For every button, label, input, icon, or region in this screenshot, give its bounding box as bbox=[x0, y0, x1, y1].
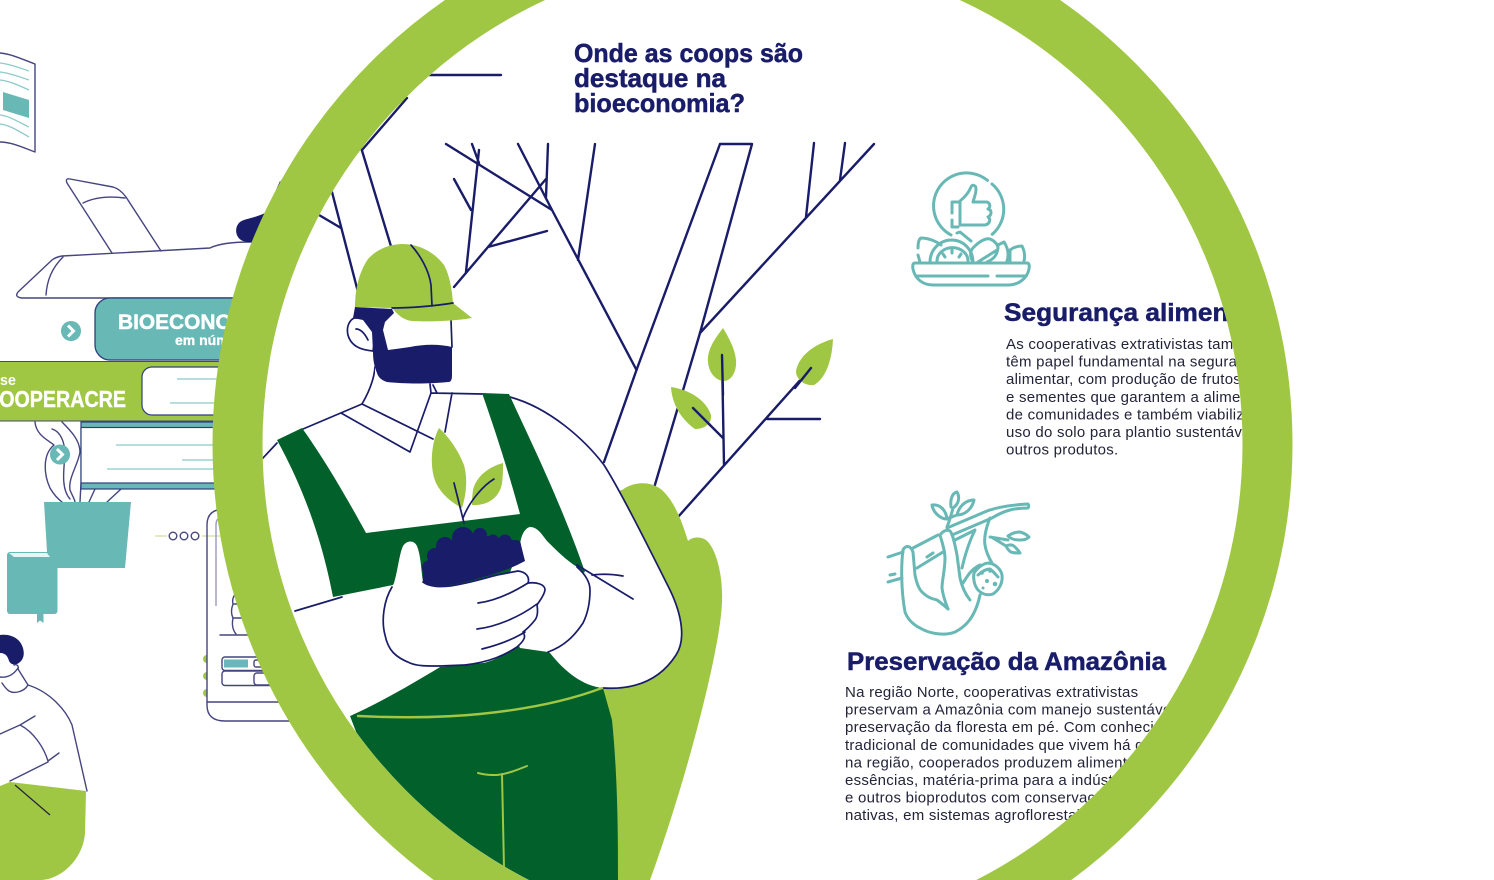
text block: Segurança alimentar: têm papel fundamental na segurança bbox=[1006, 354, 1263, 371]
title: Onde as coops são bbox=[574, 38, 803, 68]
icon: potted plant bbox=[35, 422, 131, 568]
panel: green ring bbox=[238, 0, 1268, 880]
figure: white shirt bbox=[580, 491, 681, 688]
text block: Preservação da Amazônia: preservam a Amazônia com manejo sustentável e bbox=[845, 702, 1188, 719]
figure: shirt outline bbox=[262, 367, 682, 688]
text block: Segurança alimentar: e sementes que garantem a alimentação bbox=[1006, 389, 1287, 406]
figure: overalls bib and straps bbox=[277, 393, 586, 597]
icon: teal book bbox=[7, 552, 58, 623]
icon: tree leaves bbox=[671, 328, 833, 429]
button: bioeconomia em números: BIOECONOMIA bbox=[118, 310, 270, 334]
figure: left arm line bbox=[295, 597, 342, 611]
decorative dots line bbox=[155, 532, 222, 540]
icon: sloth hanging on branch bbox=[888, 492, 1029, 634]
icon: airplane bbox=[17, 179, 250, 298]
icon: navy hair fragment bbox=[236, 181, 285, 243]
panel: white circle background bbox=[262, 0, 1242, 880]
chart: bare tree illustration bbox=[319, 75, 874, 517]
text block: Segurança alimentar: uso do solo para plantio sustentável de bbox=[1006, 424, 1276, 441]
text block: Segurança alimentar: outros produtos. bbox=[1006, 442, 1118, 459]
figure: soil clump bbox=[422, 527, 525, 586]
heading: Preservação da Amazônia: Preservação da Amazônia bbox=[847, 648, 1167, 676]
title: destaque na bbox=[574, 63, 727, 93]
title bbox=[574, 42, 802, 112]
heading: Segurança alimentar: Segurança alimentar bbox=[1004, 299, 1262, 327]
text block: Segurança alimentar: As cooperativas extrativistas também bbox=[1006, 336, 1263, 353]
figure: head with cap and beard bbox=[347, 244, 472, 384]
button: bioeconomia em números: em números bbox=[175, 332, 258, 348]
title: bioeconomia? bbox=[574, 88, 745, 118]
figure: overalls trousers bbox=[350, 646, 618, 880]
icon: tablet with books bbox=[203, 509, 300, 721]
figure: seated person bbox=[0, 635, 87, 880]
text block: Preservação da Amazônia: e outros bioprodutos com conservação de espécies bbox=[845, 790, 1200, 807]
text block: Preservação da Amazônia: Na região Norte, cooperativas extrativistas bbox=[845, 684, 1138, 701]
text block: Segurança alimentar: de comunidades e também viabilizam o bbox=[1006, 406, 1278, 423]
figure: light green bush bbox=[603, 483, 722, 880]
icon: seedling bbox=[432, 428, 503, 523]
panel: white book bbox=[81, 422, 221, 489]
icon: arrow button one bbox=[61, 321, 81, 341]
text block: Preservação da Amazônia: essências, matéria-prima para a indústria bbox=[845, 772, 1131, 789]
panel: content inside circle bbox=[262, 38, 1292, 880]
icon: salad bowl with thumbs up bbox=[913, 173, 1029, 285]
panel: previous illustration behind the ring bbox=[0, 53, 300, 880]
figure: left hand cupping soil bbox=[383, 542, 545, 666]
icon: open book top left bbox=[0, 53, 35, 152]
figure: right hand bbox=[500, 527, 633, 652]
button: bioeconomia em números bbox=[95, 298, 270, 360]
text block: Segurança alimentar: alimentar, com produção de frutos bbox=[1006, 371, 1241, 388]
button: case Cooperacre bbox=[0, 362, 275, 421]
text block: Preservação da Amazônia: tradicional de comunidades que vivem há gerações bbox=[845, 737, 1199, 754]
figure: belt line bbox=[358, 688, 602, 717]
text block: Preservação da Amazônia: na região, cooperados produzem alimentos, bbox=[845, 754, 1148, 771]
figure: trouser pocket bbox=[478, 766, 527, 868]
text block: Preservação da Amazônia: preservação da floresta em pé. Com conhecimento bbox=[845, 719, 1197, 736]
figure: farmer holding a seedling bbox=[262, 244, 682, 880]
text block: Preservação da Amazônia: nativas, em sistemas agroflorestais. bbox=[845, 807, 1092, 824]
icon: arrow button two bbox=[50, 444, 70, 464]
figure: white arm cover below bib bbox=[333, 585, 440, 716]
